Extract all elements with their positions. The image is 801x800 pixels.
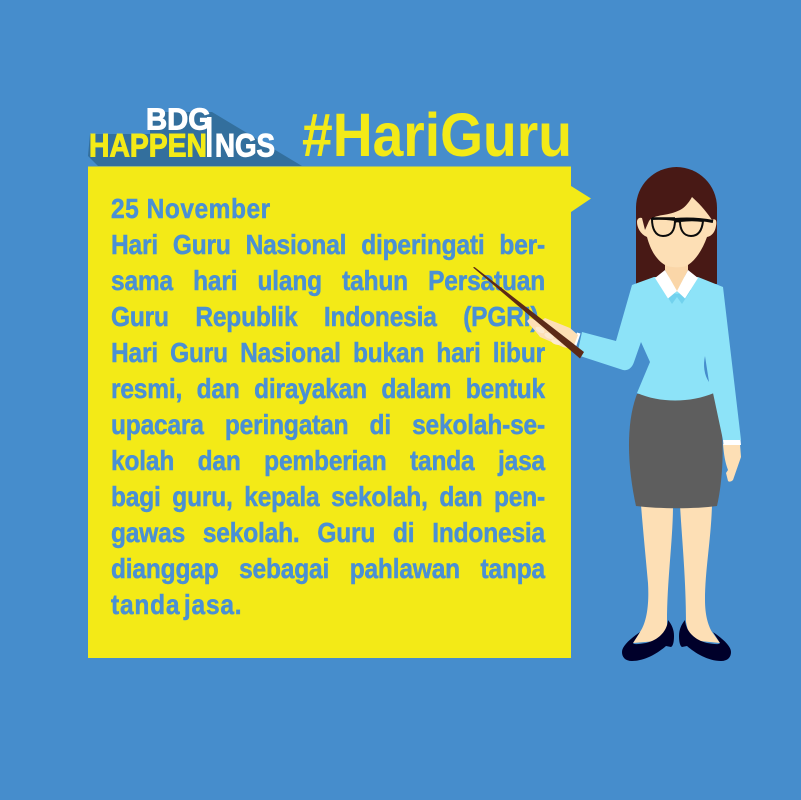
neck and face — [637, 197, 716, 292]
text block: Hari Guru description: gawas sekolah. Guru di Indonesia — [111, 517, 545, 548]
pointer stick — [473, 267, 584, 358]
text block: Hari Guru description: Hari Guru Nasional bukan hari libur — [111, 337, 545, 368]
logo: BDG Happenings — [88, 102, 302, 166]
text block: Hari Guru description: Guru Republik Indonesia (PGRI). — [111, 301, 545, 332]
skirt — [629, 393, 723, 508]
waist gap — [704, 356, 709, 382]
text block: Hari Guru description: 25 November — [111, 193, 271, 224]
logo and hashtag header — [88, 101, 572, 169]
hair — [636, 167, 717, 284]
text block: Hari Guru description: sama hari ulang tahun Persatuan — [111, 265, 545, 296]
collar — [655, 270, 698, 298]
hand: right — [723, 444, 741, 482]
logo: BDG Happenings: NGS — [215, 128, 275, 164]
text block: Hari Guru description: tanda jasa. — [111, 589, 242, 620]
hand: holding pointer — [527, 318, 578, 348]
shoes — [622, 620, 731, 661]
text block: Hari Guru description: kolah dan pemberian tanda jasa — [111, 445, 545, 476]
glasses — [652, 218, 713, 236]
shirt — [577, 277, 741, 440]
text block: Hari Guru description: bagi guru, kepala sekolah, dan pen- — [111, 481, 545, 512]
heading: #HariGuru: #HariGuru — [302, 101, 572, 169]
text block: Hari Guru description — [111, 193, 546, 620]
logo: BDG Happenings: HAPPEN — [89, 128, 207, 164]
cuffs — [573, 332, 741, 445]
text block: Hari Guru description: resmi, dan dirayakan dalam bentuk — [111, 373, 545, 404]
collar shadow — [663, 290, 691, 304]
legs — [633, 505, 720, 643]
text block: Hari Guru description: dianggap sebagai pahlawan tanpa — [111, 553, 545, 584]
text block: Hari Guru description: Hari Guru Nasional diperingati ber- — [111, 229, 545, 260]
fingers — [534, 325, 562, 346]
logo: BDG Happenings: BDG — [146, 102, 211, 136]
text block: Hari Guru description: upacara peringatan di sekolah-se- — [111, 409, 545, 440]
